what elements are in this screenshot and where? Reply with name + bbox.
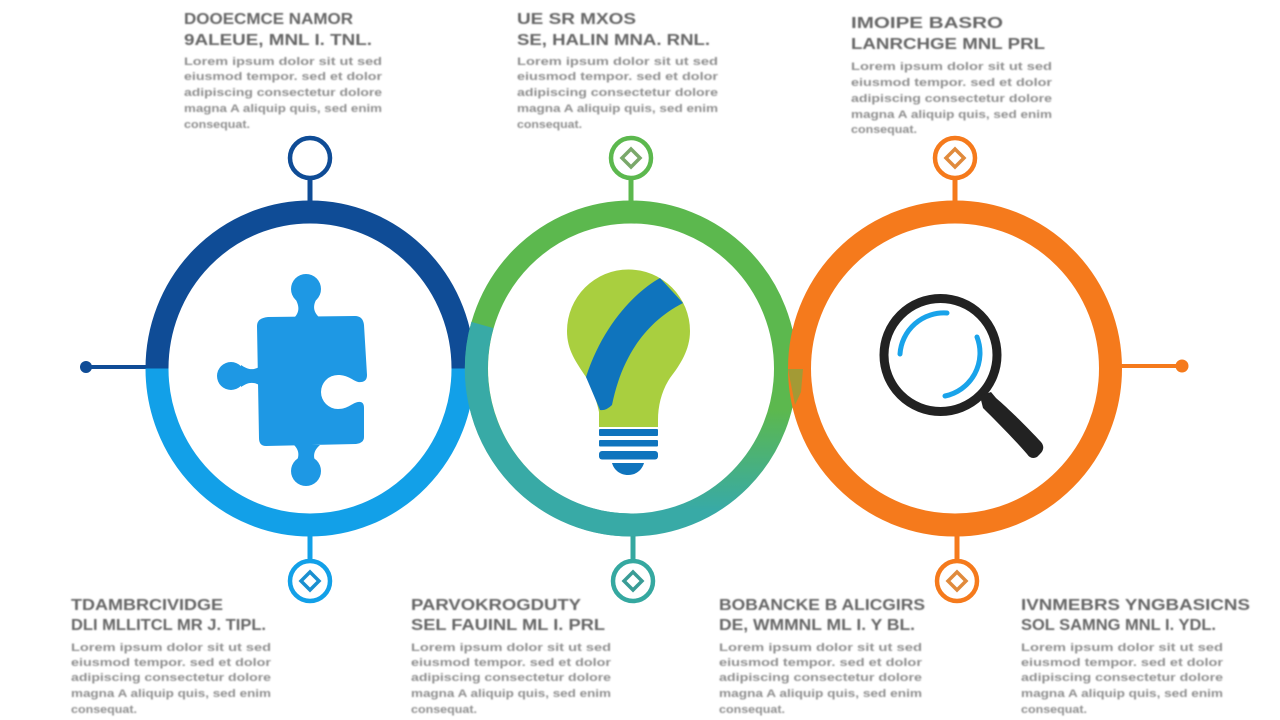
heading bbox=[1021, 597, 1250, 634]
ring: blue light bottom half bbox=[157, 368, 463, 525]
ring: blue dark top half bbox=[157, 212, 463, 368]
heading bbox=[184, 11, 372, 49]
body: adipiscing consectetur dolore bbox=[71, 672, 271, 684]
puzzle left knob bbox=[217, 362, 259, 390]
body: consequat. bbox=[411, 704, 477, 716]
heading: IMOIPE BASRO bbox=[851, 15, 1003, 32]
bulb base stripes bbox=[599, 429, 658, 475]
ring overlap: olive blend bbox=[788, 369, 803, 405]
pin: blue top marker bbox=[290, 138, 330, 202]
body: Lorem ipsum dolor sit ut sed bbox=[411, 642, 611, 654]
bulb blue band bbox=[586, 278, 683, 410]
ring: orange circle bbox=[800, 212, 1110, 525]
heading: TDAMBRCIVIDGE bbox=[71, 597, 223, 614]
body: magna A aliquip quis, sed enim bbox=[411, 688, 611, 700]
bulb glass bbox=[567, 269, 690, 427]
body bbox=[411, 642, 612, 716]
pin: green top marker bbox=[611, 138, 651, 202]
body: consequat. bbox=[1021, 704, 1087, 716]
heading: SEL FAUINL ML I. PRL bbox=[411, 617, 605, 634]
body: eiusmod tempor. sed et dolor bbox=[719, 657, 923, 669]
heading: SOL SAMNG MNL I. YDL. bbox=[1021, 617, 1216, 634]
body bbox=[71, 642, 272, 716]
body: Lorem ipsum dolor sit ut sed bbox=[184, 56, 382, 68]
body: adipiscing consectetur dolore bbox=[719, 672, 922, 684]
body: consequat. bbox=[517, 119, 582, 131]
puzzle bottom knob bbox=[291, 445, 321, 486]
heading: BOBANCKE B ALICGIRS bbox=[719, 597, 925, 614]
heading bbox=[851, 15, 1045, 53]
heading: DE, WMMNL ML I. Y BL. bbox=[719, 617, 915, 634]
heading bbox=[71, 597, 266, 634]
heading: SE, HALIN MNA. RNL. bbox=[517, 32, 710, 49]
heading: IVNMEBRS YNGBASICNS bbox=[1021, 597, 1250, 614]
lens glints bbox=[900, 313, 980, 396]
heading bbox=[411, 597, 605, 634]
body: adipiscing consectetur dolore bbox=[1021, 672, 1223, 684]
connector: orange right dot and line bbox=[1120, 360, 1188, 372]
body: eiusmod tempor. sed et dolor bbox=[1021, 657, 1224, 669]
icon: magnifying glass bbox=[884, 298, 1043, 458]
puzzle body bbox=[257, 316, 367, 446]
body bbox=[517, 56, 719, 131]
body bbox=[851, 61, 1053, 136]
body: magna A aliquip quis, sed enim bbox=[71, 688, 271, 700]
heading: LANRCHGE MNL PRL bbox=[851, 36, 1045, 53]
panel: orange ring bbox=[788, 138, 1188, 601]
body: adipiscing consectetur dolore bbox=[851, 93, 1052, 105]
body: Lorem ipsum dolor sit ut sed bbox=[719, 642, 922, 654]
text block: bottom 3 bbox=[719, 597, 925, 716]
text block: top left bbox=[184, 11, 383, 131]
body: magna A aliquip quis, sed enim bbox=[1021, 688, 1223, 700]
body bbox=[719, 642, 923, 716]
body: consequat. bbox=[71, 704, 137, 716]
body: Lorem ipsum dolor sit ut sed bbox=[71, 642, 271, 654]
body: adipiscing consectetur dolore bbox=[184, 87, 382, 99]
pin: blue bottom marker bbox=[290, 536, 330, 601]
pin: orange bottom marker bbox=[937, 536, 977, 601]
icon: light bulb bbox=[567, 269, 690, 475]
body: magna A aliquip quis, sed enim bbox=[184, 103, 382, 115]
body: magna A aliquip quis, sed enim bbox=[517, 103, 718, 115]
body: Lorem ipsum dolor sit ut sed bbox=[517, 56, 718, 68]
body: consequat. bbox=[184, 119, 250, 131]
heading: 9ALEUE, MNL I. TNL. bbox=[184, 32, 372, 49]
panel: green ring bbox=[476, 138, 786, 601]
body: magna A aliquip quis, sed enim bbox=[719, 688, 922, 700]
text block: bottom 4 bbox=[1021, 597, 1250, 716]
connector: blue left dot and line bbox=[80, 361, 150, 373]
body: Lorem ipsum dolor sit ut sed bbox=[1021, 642, 1223, 654]
body: eiusmod tempor. sed et dolor bbox=[184, 71, 383, 83]
heading: DOOECMCE NAMOR bbox=[184, 11, 353, 28]
icon: puzzle piece bbox=[217, 274, 367, 486]
pin: teal bottom marker bbox=[613, 536, 653, 601]
panel: blue ring bbox=[80, 138, 463, 601]
body: consequat. bbox=[719, 704, 785, 716]
heading: UE SR MXOS bbox=[517, 11, 636, 28]
body: adipiscing consectetur dolore bbox=[517, 87, 718, 99]
lens rim bbox=[884, 298, 997, 412]
body: eiusmod tempor. sed et dolor bbox=[517, 71, 719, 83]
heading bbox=[719, 597, 925, 634]
ring: teal lower-left arc bbox=[476, 325, 631, 525]
heading: PARVOKROGDUTY bbox=[411, 597, 581, 614]
body: eiusmod tempor. sed et dolor bbox=[411, 657, 612, 669]
body: eiusmod tempor. sed et dolor bbox=[851, 77, 1053, 89]
body bbox=[1021, 642, 1224, 716]
body: magna A aliquip quis, sed enim bbox=[851, 109, 1052, 121]
text block: top right bbox=[851, 15, 1053, 136]
text block: bottom 2 bbox=[411, 597, 612, 716]
body: eiusmod tempor. sed et dolor bbox=[71, 657, 272, 669]
body bbox=[184, 56, 383, 131]
text block: top center bbox=[517, 11, 719, 131]
text block: bottom 1 bbox=[71, 597, 272, 716]
body: Lorem ipsum dolor sit ut sed bbox=[851, 61, 1052, 73]
pin: orange top marker bbox=[935, 138, 975, 202]
body: consequat. bbox=[851, 124, 917, 136]
ring: green arc bbox=[476, 212, 786, 525]
heading bbox=[517, 11, 710, 49]
heading: DLI MLLITCL MR J. TIPL. bbox=[71, 617, 266, 634]
puzzle top knob bbox=[291, 274, 321, 318]
handle bbox=[980, 392, 1043, 458]
body: adipiscing consectetur dolore bbox=[411, 672, 611, 684]
